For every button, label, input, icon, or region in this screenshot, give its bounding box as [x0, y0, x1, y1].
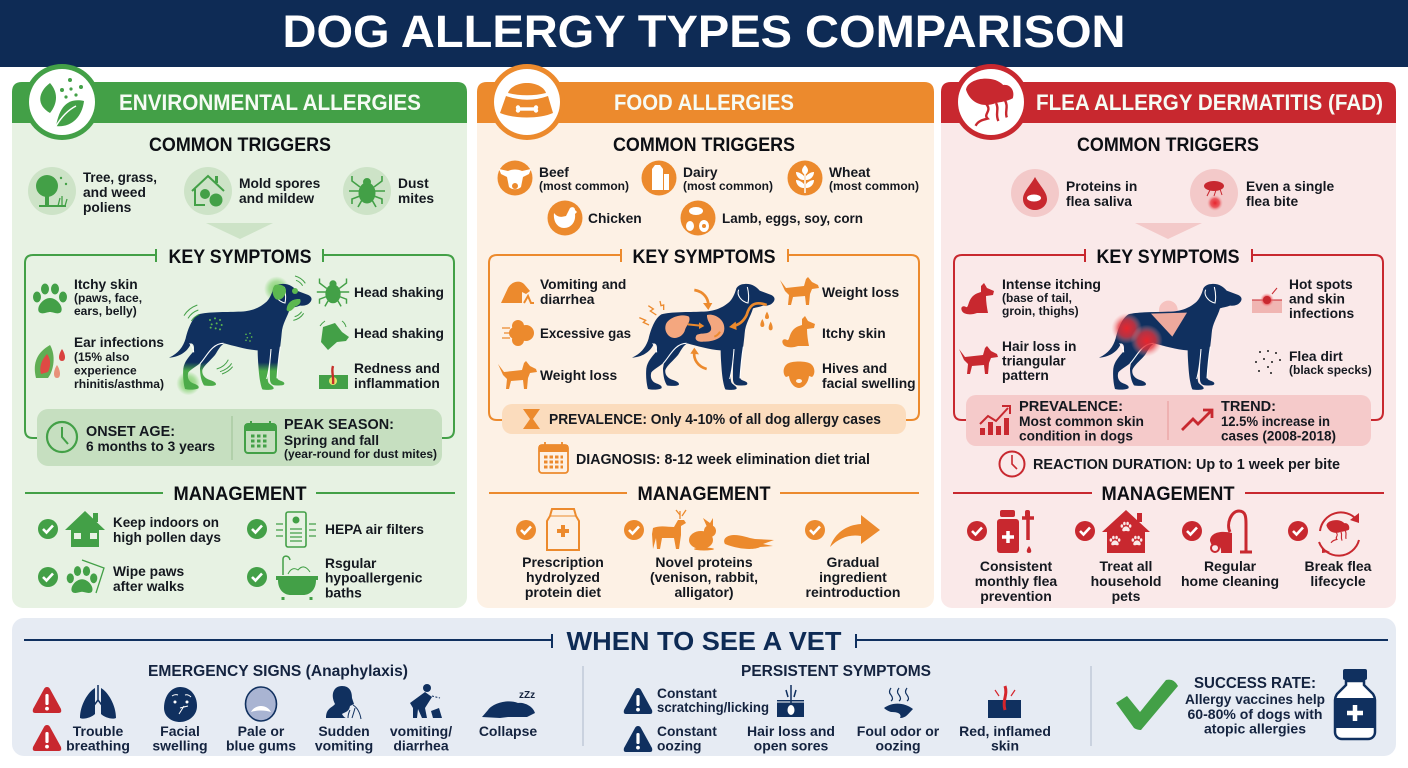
symptom: constant scratching: Constant	[657, 686, 717, 701]
icon: warning red	[33, 687, 61, 751]
sign: trouble breathing: Trouble	[73, 723, 123, 739]
management: novel proteins: Novel proteins	[655, 554, 753, 570]
management: gradual reintroduction: Gradual	[827, 554, 879, 570]
trigger: single flea bite: flea bite	[1246, 194, 1298, 209]
stat bar: prevalence and trend: TREND:	[1221, 398, 1276, 415]
trigger: flea saliva	[1011, 169, 1137, 217]
symptom: ear infections: (15% also	[74, 350, 129, 364]
symptom: itchy skin: ears, belly)	[74, 304, 137, 318]
symptom: itchy skin	[782, 316, 886, 347]
panel header	[12, 82, 467, 123]
management: keep indoors: Keep indoors on	[113, 515, 219, 530]
trigger: pollens: and weed	[83, 185, 146, 200]
symptom: weight loss left	[498, 361, 617, 389]
symptom: head shaking: Head shaking	[354, 326, 444, 341]
management: break lifecycle	[1288, 512, 1372, 589]
subheading: emergency signs: EMERGENCY SIGNS (Anaphylaxis)	[148, 663, 408, 680]
management: novel proteins: alligator)	[674, 584, 734, 600]
trigger: mold: and mildew	[239, 191, 314, 206]
success rate: atopic allergies	[1204, 721, 1306, 737]
sign: vomiting diarrhea: vomiting/	[390, 723, 452, 739]
dog illustration: food	[632, 284, 775, 390]
sign: facial swelling	[152, 687, 208, 754]
dog illustration: flea	[1099, 284, 1242, 390]
management: baths	[247, 556, 423, 600]
trigger: wheat	[788, 160, 919, 196]
management: baths: Rsgular	[325, 556, 377, 571]
arrow: triggers to symptoms	[206, 223, 273, 239]
trigger: wheat: (most common)	[829, 179, 919, 193]
symptom: hives: Hives and	[822, 361, 887, 376]
symptom: intense itching: Intense itching	[1002, 277, 1101, 292]
trigger: beef: (most common)	[539, 179, 629, 193]
trigger: pollens	[28, 167, 157, 215]
sign: pale gums	[226, 687, 296, 754]
panel: when to see a vet	[12, 618, 1396, 756]
header banner	[0, 0, 1408, 67]
symptom: hot spots: infections	[1289, 306, 1354, 321]
management: wipe paws: Wipe paws	[113, 564, 185, 579]
heading: key symptoms: KEY SYMPTOMS	[168, 246, 312, 268]
trigger: wheat: Wheat	[829, 165, 871, 180]
management: home cleaning: home cleaning	[1181, 573, 1279, 589]
stat bar: prevalence and trend	[966, 395, 1371, 446]
management: wipe paws	[38, 560, 185, 594]
symptom: red inflamed skin	[959, 686, 1051, 754]
icon: vaccine bottle	[1335, 669, 1375, 739]
trigger: chicken	[548, 200, 642, 236]
symptom: constant oozing: Constant	[657, 724, 717, 739]
management: treat pets: pets	[1112, 588, 1141, 604]
panel: flea allergy dermatitis	[941, 64, 1396, 608]
sign: pale gums: blue gums	[226, 738, 296, 754]
symptom: constant scratching	[624, 686, 769, 715]
management: gradual reintroduction: reintroduction	[806, 584, 900, 600]
management: monthly prevention: prevention	[980, 588, 1052, 604]
symptom: red inflamed skin: skin	[991, 738, 1019, 754]
trigger: dust mites	[343, 167, 434, 215]
stat bar: onset and season: (year-round for dust mites)	[284, 447, 437, 461]
icon: green check	[1116, 680, 1178, 730]
heading: common triggers: COMMON TRIGGERS	[1077, 134, 1259, 156]
icon: leaves and pollen	[24, 64, 100, 140]
symptom: vomiting	[501, 277, 626, 307]
symptom: hives	[784, 361, 916, 391]
trigger: flea saliva: Proteins in	[1066, 179, 1137, 194]
management: keep indoors: high pollen days	[113, 530, 221, 545]
success rate: 60-80% of dogs with	[1188, 706, 1322, 722]
trigger: dairy: (most common)	[683, 179, 773, 193]
trigger: mold: Mold spores	[239, 176, 321, 191]
symptom: gas	[502, 320, 631, 346]
symptom: hot spots: and skin	[1289, 292, 1345, 306]
stat bar: onset and season	[37, 409, 442, 466]
management: prescription diet: hydrolyzed	[526, 569, 600, 585]
management: break lifecycle: Break flea	[1305, 558, 1372, 574]
stat bar: prevalence and trend: condition in dogs	[1019, 428, 1133, 444]
symptom: head shaking tick	[317, 278, 444, 306]
trigger: dust mites: mites	[398, 191, 434, 206]
management: prescription diet	[516, 509, 604, 600]
management: prescription diet: protein diet	[525, 584, 601, 600]
heading: management: MANAGEMENT	[174, 483, 307, 505]
management: home cleaning: Regular	[1204, 558, 1257, 574]
arrow: triggers to symptoms	[1135, 223, 1202, 239]
symptom: itchy skin	[33, 277, 142, 318]
symptom: head shaking tick: Head shaking	[354, 285, 444, 300]
trigger: single flea bite	[1190, 169, 1335, 217]
heading: management: MANAGEMENT	[638, 483, 771, 505]
symptom: intense itching	[961, 277, 1101, 318]
stat bar: onset and season: Spring and fall	[284, 433, 379, 448]
symptom: weight loss left: Weight loss	[540, 368, 617, 383]
subheading: persistent symptoms: PERSISTENT SYMPTOMS	[741, 663, 931, 680]
management: home cleaning	[1181, 511, 1279, 589]
management: novel proteins	[624, 510, 774, 600]
symptom: vomiting: diarrhea	[540, 292, 595, 307]
sign: sudden vomiting	[315, 686, 373, 754]
heading: key symptoms: KEY SYMPTOMS	[1096, 246, 1240, 268]
symptom: hair loss: pattern	[1002, 368, 1049, 383]
stat bar: prevalence and trend: PREVALENCE:	[1019, 398, 1123, 415]
symptom: intense itching: (base of tail,	[1002, 291, 1072, 305]
management: hepa filter	[247, 512, 424, 547]
dog illustration: environmental	[169, 276, 312, 395]
symptom: hair loss and sores: Hair loss and	[747, 723, 835, 739]
stat bar: onset and season: ONSET AGE:	[86, 423, 175, 440]
symptom: hair loss and sores: open sores	[754, 738, 829, 754]
symptom: ear infections: experience	[74, 364, 137, 378]
trigger: dairy	[642, 160, 773, 196]
symptom: redness	[319, 361, 440, 391]
sign: vomiting diarrhea: diarrhea	[393, 738, 449, 754]
trigger: dairy: Dairy	[683, 165, 718, 180]
symptom: constant scratching: scratching/licking	[657, 700, 769, 715]
callout: diagnosis	[539, 442, 870, 473]
symptom: weight loss right: Weight loss	[822, 285, 899, 300]
symptom: flea dirt: Flea dirt	[1289, 349, 1343, 364]
management: baths: baths	[325, 585, 362, 600]
symptom: ear infections	[35, 335, 164, 391]
trigger: pollens: poliens	[83, 200, 132, 215]
trigger: beef	[498, 160, 629, 196]
trigger: beef: Beef	[539, 165, 569, 180]
management: monthly prevention	[967, 510, 1057, 604]
trigger: lamb eggs soy corn: Lamb, eggs, soy, corn	[722, 211, 863, 226]
symptom: redness: inflammation	[354, 376, 440, 391]
symptom: vomiting: Vomiting and	[540, 277, 626, 292]
symptom: hair loss and sores	[747, 685, 835, 754]
symptom: hair loss	[959, 339, 1076, 383]
symptom: head shaking	[320, 321, 444, 350]
symptom: itchy skin: (paws, face,	[74, 291, 142, 305]
panel header	[941, 82, 1396, 123]
trigger: mold	[184, 167, 321, 215]
title: DOG ALLERGY TYPES COMPARISON	[282, 6, 1126, 57]
management: treat pets	[1075, 510, 1161, 604]
stat bar: prevalence and trend: cases (2008-2018)	[1221, 428, 1336, 444]
success rate: Allergy vaccines help	[1185, 691, 1325, 707]
symptom: hives: facial swelling	[822, 376, 916, 391]
stat bar: prevalence: PREVALENCE: Only 4-10% of all dog allergy cases	[549, 412, 881, 428]
symptom: hair loss: Hair loss in	[1002, 339, 1076, 354]
stat bar: onset and season: 6 months to 3 years	[86, 439, 215, 454]
panel: environmental allergies	[12, 64, 467, 608]
management: monthly prevention: monthly flea	[975, 573, 1057, 589]
management: break lifecycle: lifecycle	[1310, 573, 1366, 589]
sign: pale gums: Pale or	[238, 723, 285, 739]
symptom: redness: Redness and	[354, 361, 440, 376]
sign: collapse: Collapse	[479, 723, 537, 739]
sign: trouble breathing	[66, 685, 130, 754]
arrows: digestive callouts	[639, 290, 773, 369]
heading: management: MANAGEMENT	[1102, 483, 1235, 505]
panel header: FLEA ALLERGY DERMATITIS (FAD)	[1036, 90, 1383, 115]
callout: reaction duration: REACTION DURATION: Up to 1 week per bite	[1033, 457, 1340, 473]
symptom: hair loss: triangular	[1002, 354, 1066, 368]
callout: reaction duration	[1000, 452, 1340, 476]
icon: flea	[953, 64, 1029, 140]
symptom: flea dirt	[1255, 349, 1372, 377]
success rate	[1185, 675, 1325, 737]
panel header: ENVIRONMENTAL ALLERGIES	[119, 90, 421, 115]
symptom: intense itching: groin, thighs)	[1002, 304, 1079, 318]
sign: collapse: zZz	[519, 690, 535, 701]
symptom: hot spots: Hot spots	[1289, 277, 1353, 292]
stat bar: prevalence and trend: Most common skin	[1019, 414, 1144, 429]
trigger: single flea bite: Even a single	[1246, 179, 1335, 194]
icon: food bowl	[489, 64, 565, 140]
trigger: chicken: Chicken	[588, 211, 642, 226]
stat bar: prevalence and trend: 12.5% increase in	[1221, 414, 1330, 429]
sign: sudden vomiting: vomiting	[315, 738, 373, 754]
symptom: hot spots	[1252, 277, 1354, 321]
sign: trouble breathing: breathing	[66, 738, 130, 754]
symptom: ear infections: rhinitis/asthma)	[74, 377, 164, 391]
panel header	[477, 82, 934, 123]
symptom: foul odor	[857, 688, 940, 754]
management: gradual reintroduction	[805, 515, 900, 600]
stat bar: prevalence	[502, 404, 906, 434]
management: treat pets: Treat all	[1100, 558, 1152, 574]
success rate: SUCCESS RATE:	[1194, 675, 1316, 692]
symptom: flea dirt: (black specks)	[1289, 363, 1372, 377]
symptom: foul odor: oozing	[875, 738, 921, 754]
symptom: gas: Excessive gas	[540, 326, 631, 341]
symptom: constant oozing: oozing	[657, 738, 701, 754]
symptom: red inflamed skin: Red, inflamed	[959, 723, 1051, 739]
heading: common triggers: COMMON TRIGGERS	[613, 134, 795, 156]
heading: key symptoms: KEY SYMPTOMS	[632, 246, 776, 268]
trigger: dust mites: Dust	[398, 176, 429, 191]
sign: facial swelling: swelling	[152, 738, 208, 754]
sign: facial swelling: Facial	[160, 723, 200, 739]
management: prescription diet: Prescription	[522, 554, 604, 570]
panel: food allergies	[477, 64, 934, 608]
management: monthly prevention: Consistent	[980, 558, 1053, 574]
symptom: ear infections: Ear infections	[74, 335, 164, 350]
sign: collapse	[479, 690, 537, 739]
management: hepa filter: HEPA air filters	[325, 522, 424, 537]
trigger: pollens: Tree, grass,	[83, 170, 157, 185]
management: wipe paws: after walks	[113, 579, 185, 594]
symptom: itchy skin: Itchy skin	[822, 326, 886, 341]
symptom: foul odor: Foul odor or	[857, 723, 940, 739]
management: novel proteins: (venison, rabbit,	[650, 569, 758, 585]
symptom: weight loss right	[780, 277, 899, 305]
sign: vomiting diarrhea	[390, 684, 452, 754]
callout: diagnosis: DIAGNOSIS: 8-12 week elimination diet trial	[576, 452, 870, 468]
heading: common triggers: COMMON TRIGGERS	[149, 134, 331, 156]
management: baths: hypoallergenic	[325, 571, 423, 586]
heading: when to see a vet: WHEN TO SEE A VET	[566, 626, 842, 656]
trigger: flea saliva: flea saliva	[1066, 194, 1132, 209]
sign: sudden vomiting: Sudden	[318, 723, 370, 739]
panel header: FOOD ALLERGIES	[614, 90, 794, 115]
trigger: lamb eggs soy corn	[680, 200, 863, 236]
management: keep indoors	[38, 511, 221, 547]
symptom: constant oozing	[624, 724, 717, 754]
management: treat pets: household	[1091, 573, 1161, 589]
stat bar: onset and season: PEAK SEASON:	[284, 416, 394, 433]
symptom: itchy skin: Itchy skin	[74, 277, 138, 292]
management: gradual reintroduction: ingredient	[819, 569, 887, 585]
